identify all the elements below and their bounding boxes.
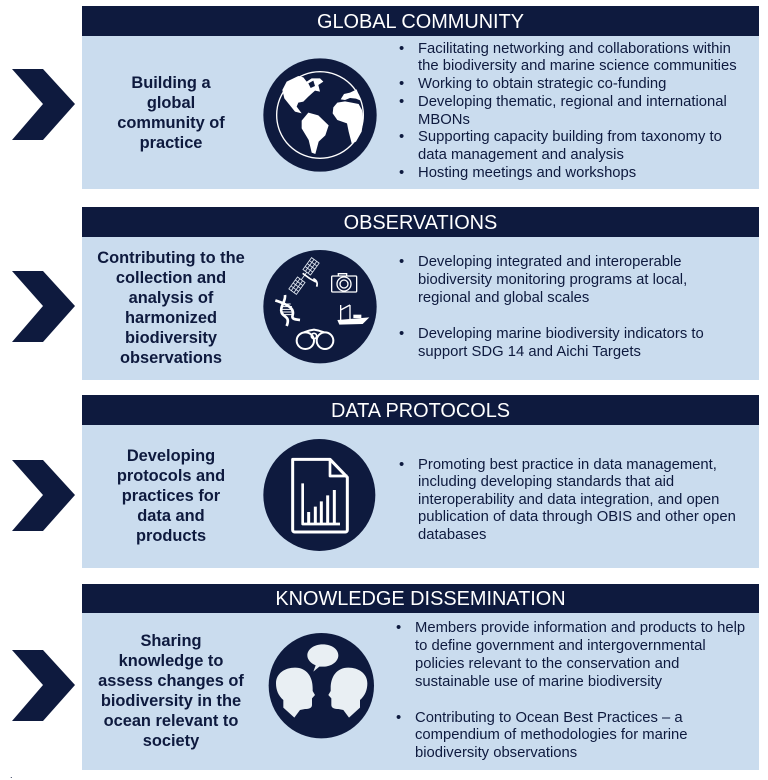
- bullet list: interoperability and data integration, and open: [418, 492, 719, 508]
- lead text: Contributing to the: [97, 249, 245, 267]
- bullet list: [396, 620, 745, 761]
- bullet list: data management and analysis: [418, 147, 624, 163]
- lead text: collection and: [116, 269, 226, 287]
- panel background: [82, 36, 759, 189]
- bullet list: [400, 40, 737, 181]
- lead text: community of: [117, 114, 225, 132]
- bullet list: sustainable use of marine biodiversity: [415, 674, 662, 690]
- icon: globe: [263, 58, 377, 172]
- icon: document with bar chart: [263, 439, 376, 551]
- heading: data protocols: [82, 395, 759, 425]
- bullet list: support SDG 14 and Aichi Targets: [418, 344, 641, 360]
- heading: observations: [82, 207, 759, 237]
- heading: global community: [82, 6, 759, 36]
- bullet list: databases: [418, 527, 486, 543]
- lead text: ocean relevant to: [104, 712, 238, 730]
- bullet list: regional and global scales: [418, 290, 589, 306]
- panel background: [82, 425, 759, 568]
- bullet list: policies relevant to the conservation and: [415, 656, 679, 672]
- heading: observations: OBSERVATIONS: [344, 212, 497, 234]
- bullet list: Promoting best practice in data management,: [418, 456, 717, 472]
- panel: knowledge dissemination: [12, 584, 759, 770]
- lead text: observations: [120, 349, 222, 367]
- bullet list: Facilitating networking and collaborations within: [418, 40, 731, 56]
- lead text: data and: [137, 507, 205, 525]
- bullet list: [400, 456, 736, 543]
- lead text: Sharing: [140, 632, 202, 650]
- lead text: analysis of: [129, 289, 213, 307]
- bullet list: biodiversity observations: [415, 745, 577, 761]
- panel background: [82, 237, 759, 380]
- icon: observation tools: [263, 250, 377, 364]
- bullet list: Members provide information and products to help: [415, 620, 745, 636]
- heading: data protocols: DATA PROTOCOLS: [331, 400, 510, 422]
- lead text: protocols and: [117, 467, 225, 485]
- panel: data protocols: [12, 395, 759, 568]
- heading: global community: GLOBAL COMMUNITY: [317, 11, 524, 33]
- bullet list: Working to obtain strategic co-funding: [418, 76, 666, 92]
- lead text: practice: [140, 134, 202, 152]
- lead text: Building a: [131, 74, 211, 92]
- lead text: [98, 632, 244, 750]
- bullet list: Developing thematic, regional and international: [418, 94, 727, 110]
- panel: observations: [12, 207, 759, 380]
- lead text: biodiversity in the: [101, 692, 241, 710]
- heading: knowledge dissemination: KNOWLEDGE DISSEMINATION: [275, 588, 566, 610]
- bullet list: to define government and intergovernmental: [415, 638, 706, 654]
- bullet list: Hosting meetings and workshops: [418, 165, 636, 181]
- panel background: [82, 613, 759, 770]
- lead text: harmonized: [125, 309, 217, 327]
- lead text: [117, 74, 225, 152]
- lead text: Developing: [127, 447, 215, 465]
- bullet list: Developing integrated and interoperable: [418, 254, 682, 270]
- chevron arrow 4: [12, 650, 75, 721]
- bullet list: compendium of methodologies for marine: [415, 727, 688, 743]
- lead text: global: [147, 94, 195, 112]
- heading: knowledge dissemination: [82, 584, 759, 613]
- chevron arrow 1: [12, 69, 75, 140]
- bullet list: including developing standards that aid: [418, 474, 674, 490]
- lead text: biodiversity: [125, 329, 217, 347]
- lead text: society: [143, 732, 199, 750]
- bullet list: biodiversity monitoring programs at local,: [418, 272, 687, 288]
- lead text: practices for: [122, 487, 220, 505]
- bullet list: publication of data through OBIS and other open: [418, 509, 736, 525]
- bullet list: MBONs: [418, 112, 470, 128]
- chevron arrow 2: [12, 271, 75, 342]
- bullet list: Developing marine biodiversity indicators to: [418, 326, 704, 342]
- bullet list: Supporting capacity building from taxonomy to: [418, 129, 722, 145]
- lead text: knowledge to: [119, 652, 223, 670]
- stray dot: .: [10, 770, 13, 780]
- lead text: [117, 447, 225, 545]
- bullet list: Contributing to Ocean Best Practices – a: [415, 710, 683, 726]
- panel: global community: [12, 6, 759, 189]
- lead text: [97, 249, 245, 367]
- bullet list: [400, 254, 704, 360]
- chevron arrow 3: [12, 460, 75, 531]
- bullet list: the biodiversity and marine science communities: [418, 58, 737, 74]
- lead text: assess changes of: [98, 672, 244, 690]
- lead text: products: [136, 527, 206, 545]
- icon: two heads talking: [268, 633, 374, 738]
